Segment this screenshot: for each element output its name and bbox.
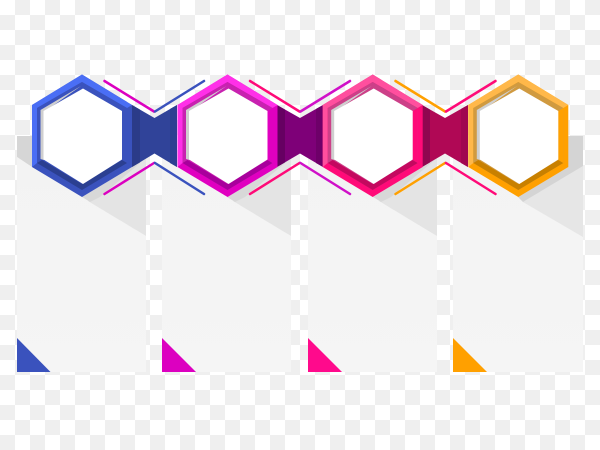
panel: card 4 [453,136,583,372]
accent lines: first junction [104,81,204,194]
corner triangle 2 [162,338,196,372]
hexagon 3: pink [323,74,423,197]
connector: purple [277,105,323,167]
panel: card 3 [308,158,437,372]
white badge [44,88,122,184]
corner triangle 3 [308,338,342,372]
connector: blue [132,105,177,167]
accent lines: third junction [396,81,496,194]
white badge [334,88,413,184]
panel: card 1 [17,136,146,372]
white badge [480,88,558,184]
corner triangle 4 [453,338,487,372]
hexagon 2: magenta [178,74,278,197]
corner triangle 1 [17,338,50,372]
hexagon 4: orange [468,74,568,197]
panel: card 2 [162,158,291,372]
white badge [189,88,268,184]
connector: crimson [422,105,468,167]
accent lines: second junction [250,81,350,194]
hexagon 1: blue [32,74,132,197]
